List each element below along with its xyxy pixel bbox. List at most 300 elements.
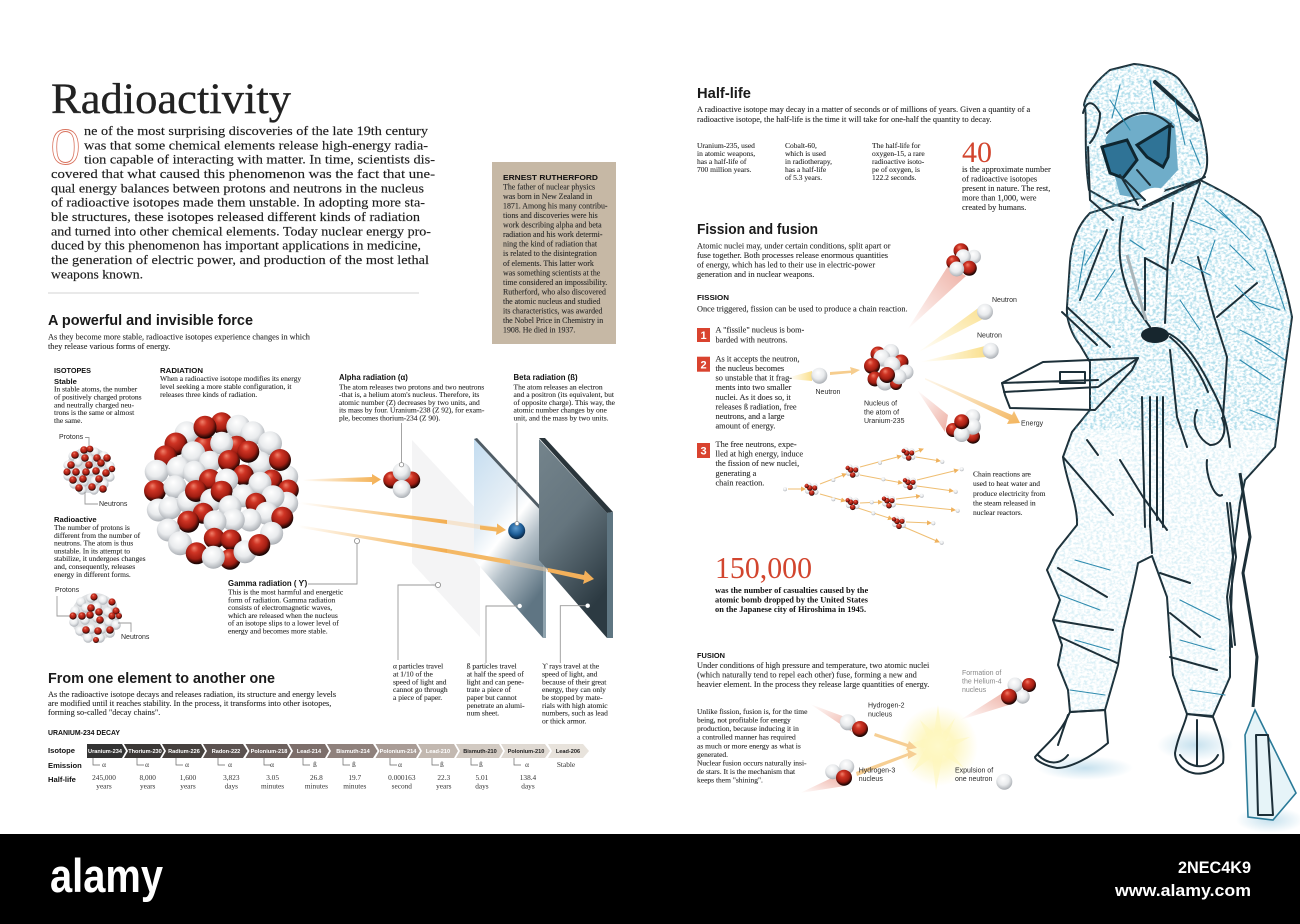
- alpha radiation text: Alpha radiation (α): [339, 373, 408, 382]
- suit fold marks: [1060, 80, 1285, 695]
- row labels: Emission: [48, 761, 82, 770]
- cobalt-60 fact: has a half-life: [785, 165, 827, 174]
- step 2: the nucleus becomes: [716, 364, 784, 373]
- oxygen-15 fact: The half-life for: [872, 141, 921, 150]
- step 2: As it accepts the neutron,: [716, 354, 800, 363]
- alpha particle: [383, 423, 420, 498]
- half-life row: years: [140, 782, 156, 790]
- expelled neutron: [955, 768, 1012, 790]
- free neutrons: Neutron: [977, 332, 1002, 340]
- suit texture: [1048, 64, 1292, 716]
- stable isotope text: and neutrally charged neu-: [54, 400, 135, 409]
- intro text block: ble structures, these isotopes released different kinds of radiation: [51, 210, 421, 224]
- statistic: 40: more than 1,000, were: [962, 194, 1037, 202]
- section: Half-life: [697, 85, 1051, 212]
- gamma radiation text and leader: energy and becomes more stable.: [228, 626, 328, 636]
- gamma radiation text and leader: of an isotope slips to a lower level of: [228, 619, 339, 628]
- upper fragment with trail: [907, 243, 981, 330]
- emission row: α: [102, 760, 106, 769]
- gamma radiation text and leader: This is the most harmful and energetic: [228, 588, 344, 596]
- biography heading: ERNEST RUTHERFORD: [503, 173, 599, 182]
- fission diagram: [790, 243, 1044, 444]
- intro text: As they become more stable, radioactive isotopes experience changes in which: [48, 332, 311, 342]
- face and gas mask: [1083, 82, 1205, 220]
- emission row: ß: [313, 760, 317, 769]
- beta radiation text: [514, 373, 616, 422]
- penetration note: beta: at half the speed of: [467, 670, 524, 678]
- fusion side note: [697, 707, 808, 785]
- penetration note: gamma: be stopped by mate-: [542, 693, 603, 702]
- penetration note: gamma: speed of light, and: [542, 670, 598, 678]
- expelled neutron: one neutron: [955, 776, 992, 783]
- penetration note: gamma: energy, they can only: [542, 685, 606, 694]
- gamma beam arrow: [298, 525, 594, 584]
- heading: From one element to another one: [48, 670, 275, 687]
- penetration note: alpha: a piece of paper.: [393, 693, 442, 702]
- uranium-235 fact: [697, 141, 755, 174]
- half-life row: years: [436, 782, 452, 790]
- step 3: chain reaction.: [716, 479, 764, 488]
- statistic: 40: created by humans.: [962, 203, 1026, 212]
- step 3: lled at high energy, induce: [716, 450, 803, 459]
- helium-4 nucleus: [960, 670, 1036, 720]
- chain reaction note: Chain reactions are: [973, 470, 1032, 479]
- radiation beams: [298, 474, 594, 584]
- radioactive nucleus diagram: Neutrons: [121, 634, 150, 641]
- isotopes heading: ISOTOPES: [54, 366, 91, 375]
- description: As the radioactive isotope decays and releases radiation, its structure and energy levels: [48, 690, 336, 699]
- heading: Half-life: [697, 85, 751, 102]
- oxygen-15 fact: [872, 141, 925, 182]
- biography text: The father of nuclear physics: [503, 182, 595, 192]
- oxygen-15 fact: radioactive isoto-: [872, 157, 925, 166]
- penetration note: alpha: [393, 582, 448, 702]
- half-life row: days: [475, 782, 489, 790]
- suit silhouette: [1047, 180, 1292, 716]
- step 1: barded with neutrons.: [716, 335, 788, 344]
- fission heading: FISSION: [697, 293, 729, 302]
- oxygen-15 fact: 122.2 seconds.: [872, 173, 916, 182]
- hood: [1084, 64, 1207, 210]
- stock photo footer band: [0, 834, 1300, 924]
- lower fragment with trail: [917, 390, 981, 444]
- panel: radiation text: releases three kinds of radiation.: [160, 390, 257, 399]
- isotope chevrons: Bismuth-210: [463, 749, 497, 755]
- step 2: amount of energy.: [716, 422, 775, 431]
- logo: alamy: [50, 849, 163, 902]
- decay chain chart: [48, 728, 589, 790]
- penetration note: alpha: at 1/10 of the: [393, 670, 433, 678]
- description: Atomic nuclei may, under certain conditions, split apart or: [697, 241, 891, 250]
- helium-4 nucleus: the Helium-4: [962, 678, 1002, 686]
- half-life row: 22.3: [437, 773, 451, 782]
- isotope chevrons: [87, 744, 589, 758]
- image id: 2NEC4K9: [1178, 858, 1251, 877]
- large atomic nucleus: [144, 412, 299, 570]
- stable isotope text: trons is the same or almost: [54, 408, 135, 417]
- chain reaction note: nuclear reactors.: [973, 508, 1023, 517]
- emission row: ß: [352, 760, 356, 769]
- alpha radiation text: its mass by four. Uranium-238 (Z 92), for exam-: [339, 406, 485, 415]
- alpha radiation text: The atom releases two protons and two neutrons: [339, 382, 484, 391]
- biography text: Rutherford, who also discovered: [503, 287, 606, 296]
- row labels: Isotope: [48, 746, 75, 755]
- energy arrow: [925, 378, 1044, 428]
- statistic: 150,000: atomic bomb dropped by the United States: [715, 596, 869, 604]
- panel: fusion text: heavier element. In the process they release large quantities of energy.: [697, 680, 929, 689]
- radioactive isotope text: [54, 515, 146, 579]
- intro text block: weapons known.: [51, 267, 143, 281]
- beta radiation text: of opposite charge). This way, the: [514, 398, 616, 407]
- uranium-235 nucleus: Nucleus of: [864, 400, 897, 408]
- statistic: 40: of radioactive isotopes: [962, 174, 1037, 184]
- emission row: α: [270, 760, 274, 769]
- intro text block: of radioactive isotopes made them unstable. In adopting more sta-: [51, 196, 425, 210]
- penetration note: alpha: α particles travel: [393, 662, 443, 671]
- fusion side note: de stars. It is the mechanism that: [697, 767, 796, 776]
- stable nucleus diagram: Neutrons: [99, 501, 128, 508]
- panel: fusion text: FUSION: [697, 651, 725, 660]
- biography text: is related to the disintegration: [503, 249, 597, 258]
- half-life row: years: [180, 782, 196, 790]
- intro text block: covered that what caused this phenomenon was the fact that une-: [51, 167, 435, 181]
- penetration note: gamma: ϒ rays travel at the: [542, 662, 600, 671]
- intro text: [48, 332, 311, 351]
- stable isotope text: the same.: [54, 416, 82, 425]
- emission row: α: [525, 760, 529, 769]
- biography text: its characteristics, was awarded: [503, 306, 603, 315]
- half-life row: days: [225, 782, 238, 790]
- cobalt-60 fact: which is used: [785, 149, 826, 158]
- alpha beam arrow: [303, 474, 381, 485]
- radioactive nucleus diagram: Protons: [55, 587, 80, 594]
- fusion side note: a controlled manner has required: [697, 733, 796, 742]
- biography text: was something scientists at the: [503, 268, 601, 277]
- half-life row: 5.01: [476, 773, 489, 782]
- panel: fusion text: (which naturally tend to repel each other) fuse, forming a new and: [697, 671, 918, 680]
- penetration note: alpha: cannot go through: [393, 685, 448, 694]
- step 2: [697, 354, 800, 431]
- website: www.alamy.com: [1114, 881, 1251, 900]
- panel: radiation text: level seeking a more stable configuration, it: [160, 382, 292, 391]
- chain reaction arrows: [788, 449, 958, 542]
- panel: fusion text: [697, 651, 930, 785]
- emission row: Stable: [557, 760, 575, 769]
- chain reaction note: produce electricity from: [973, 489, 1046, 498]
- step 1: A "fissile" nucleus is bom-: [716, 326, 805, 335]
- step 2: neutrons, and a large: [716, 412, 785, 421]
- cobalt-60 fact: Cobalt-60,: [785, 141, 817, 150]
- step 1: 1: [700, 330, 707, 342]
- fusion diagram: [800, 670, 1036, 793]
- helium-4 nucleus: nucleus: [962, 687, 987, 694]
- incoming neutron: [790, 367, 860, 396]
- section: A powerful and invisible force: [48, 312, 311, 351]
- illustration: technician in protective suit: [1002, 60, 1300, 833]
- uranium-235 fact: 700 million years.: [697, 165, 751, 174]
- half-life row: [92, 773, 537, 790]
- energy burst: [898, 705, 978, 790]
- stable isotope text: [54, 377, 142, 425]
- step 2: ments into two smaller: [716, 383, 792, 392]
- step 2: releases ß radiation, free: [716, 402, 797, 412]
- isotope chevrons: Uranium-234: [88, 749, 123, 755]
- alpha radiation text: [339, 373, 485, 422]
- penetration note: beta: num sheet.: [467, 709, 499, 718]
- stable isotope text: Stable: [54, 377, 77, 386]
- penetration note: gamma: [542, 604, 608, 725]
- step 3: the fission of new nuclei,: [716, 459, 799, 468]
- step 3: [697, 440, 803, 488]
- energy arrow: Energy: [1021, 420, 1044, 428]
- half-life row: years: [96, 782, 112, 790]
- biography text: the Nobel Price in Chemistry in: [503, 316, 603, 325]
- half-life row: days: [521, 782, 535, 790]
- penetration note: gamma: because of their great: [542, 677, 607, 686]
- isotope chevrons: Lead-206: [556, 749, 580, 755]
- panel: isotopes: [54, 366, 150, 643]
- hydrogen-3 nucleus: [800, 749, 917, 793]
- biography text: ning the kind of radiation that: [503, 240, 598, 249]
- emission row: α: [185, 760, 189, 769]
- uranium-235 nucleus: [864, 344, 914, 425]
- radioactive isotope text: Radioactive: [54, 515, 97, 524]
- penetration note: beta: trate a piece of: [467, 685, 512, 694]
- fusion side note: Unlike fission, fusion is, for the time: [697, 707, 808, 716]
- radioactive isotope text: stabilize, it undergoes changes: [54, 554, 146, 563]
- oxygen-15 fact: oxygen-15, a rare: [872, 149, 925, 158]
- panel: radiation text: RADIATION: [160, 366, 203, 375]
- half-life row: 138.4: [520, 773, 537, 782]
- hydrogen-2 nucleus: Hydrogen-2: [868, 703, 905, 710]
- fusion side note: as much or more energy as what is: [697, 741, 801, 750]
- panel: fission steps: Once triggered, fission can be used to produce a chain reaction.: [697, 304, 908, 313]
- panel: Ernest Rutherford biography: [492, 162, 616, 344]
- step 3: The free neutrons, expe-: [716, 440, 797, 449]
- statistic: 150,000: 150,000: [715, 550, 812, 585]
- gamma radiation text and leader: form of radiation. Gamma radiation: [228, 595, 336, 604]
- isotope chevrons: Polonium-214: [380, 749, 417, 755]
- penetration note: alpha: speed of light and: [393, 677, 447, 686]
- penetration note: beta: [467, 604, 525, 718]
- hanging cable bag: [1245, 710, 1296, 820]
- half-life row: 26.8: [310, 773, 323, 782]
- description: [697, 241, 891, 279]
- cobalt-60 fact: of 5.3 years.: [785, 173, 822, 182]
- chain reaction diagram: [783, 447, 1046, 545]
- isotope chevrons: Polonium-210: [508, 749, 544, 755]
- heading: A powerful and invisible force: [48, 312, 253, 329]
- cobalt-60 fact: in radiotherapy,: [785, 157, 832, 166]
- penetration note: beta: penetrate an alumi-: [467, 701, 525, 710]
- half-life row: second: [392, 782, 412, 790]
- emission row: α: [228, 760, 232, 769]
- drop cap: O: [51, 119, 80, 176]
- intro text block: duced by this phenomenon has important applications in medicine,: [51, 239, 421, 253]
- isotope chevrons: Thorium-230: [128, 749, 162, 755]
- emission row: [93, 758, 575, 769]
- step 2: 2: [700, 360, 707, 372]
- description: A radioactive isotope may decay in a matter of seconds or of millions of years. Given a quantity of a: [697, 105, 1030, 114]
- beta radiation text: The atom releases an electron: [514, 382, 603, 391]
- beta beam arrow: [300, 502, 506, 535]
- statistic: 40: 40: [962, 136, 992, 169]
- description: forming so-called "decay chains".: [48, 708, 160, 717]
- penetration note: gamma: or thick armor.: [542, 716, 586, 725]
- expelled neutron: Expulsion of: [955, 768, 993, 775]
- cobalt-60 fact: [785, 141, 832, 182]
- hydrogen-3 nucleus: Hydrogen-3: [859, 768, 895, 775]
- biography text: of elements. This latter work: [503, 259, 594, 268]
- isotope chevrons: Radium-226: [168, 749, 200, 755]
- statistic: 150,000: on the Japanese city of Hiroshima in 1945.: [715, 605, 866, 614]
- fusion side note: production, because inducing it in: [697, 724, 799, 733]
- row labels: [48, 746, 82, 784]
- radioactive isotope text: different from the number of: [54, 531, 141, 540]
- gamma radiation text and leader: consists of electromagnetic waves,: [228, 603, 332, 612]
- fusion side note: generated.: [697, 750, 728, 759]
- intro text block: [51, 119, 435, 281]
- free neutrons: Neutron: [992, 297, 1017, 304]
- gamma radiation text and leader: Gamma radiation ( ϒ): [228, 579, 308, 588]
- description: fuse together. Both processes release enormous quantities: [697, 251, 888, 260]
- half-life row: 245,000: [92, 773, 116, 782]
- description: of energy, which has led to their use in electric-power: [697, 260, 875, 270]
- biography text: work describing alpha and beta: [503, 221, 602, 230]
- isotope chevrons: Polonium-218: [251, 749, 287, 755]
- description: radioactive isotope, the half-life is the time it will take for one-half the quantity to decay.: [697, 115, 992, 124]
- fusion side note: Nuclear fusion occurs naturally insi-: [697, 759, 807, 768]
- description: are modified until it reaches stability. In the process, it transforms into other isotopes,: [48, 699, 331, 708]
- statistic: 40: [962, 136, 1051, 212]
- hydrogen-3 nucleus: nucleus: [859, 776, 883, 783]
- suit seams and cables: [1053, 183, 1257, 707]
- isotope chevrons: Radon-222: [212, 749, 240, 755]
- beta radiation text: Beta radiation (ß): [514, 373, 578, 382]
- fusion side note: being, not profitable for energy: [697, 716, 791, 725]
- radioactive isotope text: energy in different forms.: [54, 570, 131, 579]
- row labels: Half-life: [48, 775, 76, 784]
- title: Radioactivity: [51, 76, 292, 123]
- intro text block: tion capable of interacting with matter. In time, scientists dis-: [84, 153, 435, 167]
- half-life row: minutes: [261, 782, 284, 790]
- chart title: URANIUM-234 DECAY: [48, 728, 120, 737]
- biography text: 1871. Among his many contribu-: [503, 202, 608, 211]
- statistic: 150,000: was the number of casualties caused by the: [715, 586, 868, 595]
- half-life row: 3.05: [266, 773, 279, 782]
- uranium-235 fact: has a half-life of: [697, 157, 747, 166]
- statistic: 40: is the approximate number: [962, 165, 1051, 174]
- chain reaction note: [973, 470, 1046, 517]
- stable nucleus diagram: [59, 434, 128, 508]
- intro text block: ne of the most surprising discoveries of the late 19th century: [84, 124, 429, 138]
- uranium-235 nucleus: the atom of: [864, 410, 899, 416]
- alpha radiation text: ple, becomes thorium-234 (Z 90).: [339, 413, 440, 422]
- radiation meter box: [1002, 358, 1138, 410]
- description: [48, 690, 336, 717]
- uranium-235 fact: in atomic weapons,: [697, 149, 755, 158]
- stable isotope text: In stable atoms, the number: [54, 384, 138, 394]
- incoming neutron: Neutron: [816, 389, 841, 396]
- biography text: radiation and his work determi-: [503, 230, 603, 239]
- statistic: 150,000: [715, 550, 869, 614]
- penetration note: beta: ß particles travel: [467, 662, 517, 671]
- alpha radiation text: atomic number (Z) decreases by two units, and: [339, 398, 480, 407]
- intro text block: the generation of electric power, and production of the most lethal: [51, 253, 430, 267]
- intro text block: and turned into other chemical elements. Today nuclear energy pro-: [51, 224, 431, 238]
- free neutrons: [917, 297, 1017, 362]
- step 3: generating a: [716, 469, 757, 478]
- description: generation and in nuclear weapons.: [697, 270, 814, 279]
- panel: radiation text: [160, 366, 301, 399]
- beta particle: [508, 423, 525, 539]
- beta radiation text: and a positron (its equivalent, but: [514, 390, 615, 399]
- description: [697, 105, 1030, 124]
- mini nuclei: [804, 447, 917, 529]
- stable isotope text: of positively charged protons: [54, 392, 142, 401]
- biography text: 1908. He died in 1937.: [503, 326, 575, 334]
- half-life row: 8,000: [139, 773, 156, 782]
- biography text: time considered an impossibility.: [503, 278, 607, 287]
- step 2: nuclei. As it does so, it: [716, 393, 792, 402]
- radioactive isotope text: neutrons. The atom is thus: [54, 539, 133, 548]
- emission row: α: [398, 760, 402, 769]
- isotope chevrons: Lead-210: [426, 749, 450, 755]
- hydrogen-2 nucleus: nucleus: [868, 712, 893, 718]
- isotope chevrons: Bismuth-214: [336, 749, 371, 755]
- ground shadows: [1037, 729, 1300, 833]
- gamma radiation text and leader: [228, 538, 360, 636]
- half-life row: minutes: [343, 782, 367, 790]
- panel: fusion text: Under conditions of high pressure and temperature, two atomic nuclei: [697, 661, 930, 670]
- intro text block: was that some chemical elements release high-energy radia-: [84, 138, 428, 152]
- fusion side note: keeps them "shining".: [697, 776, 763, 785]
- emission row: ß: [440, 760, 444, 769]
- aluminum sheet: [474, 438, 546, 638]
- uranium-235 fact: Uranium-235, used: [697, 141, 755, 150]
- shielding plates: paper, aluminum, lead: [412, 438, 613, 638]
- isotope chevrons: Lead-214: [297, 749, 322, 755]
- step 3: 3: [700, 446, 707, 458]
- panel: fission steps: [697, 293, 908, 488]
- half-life row: 3,823: [223, 773, 240, 782]
- statistic: 40: present in nature. The rest,: [962, 184, 1050, 193]
- beta radiation text: unit, and the mass by two units.: [514, 413, 609, 422]
- biography text: the atomic nucleus and studied: [503, 297, 600, 306]
- half-life row: 0.000163: [388, 773, 416, 782]
- biography text: tions and discoveries were his: [503, 211, 598, 220]
- step 2: so unstable that it frag-: [716, 374, 792, 382]
- beta radiation text: atomic number changes by one: [514, 406, 607, 415]
- radioactive isotope text: and, consequently, releases: [54, 562, 135, 571]
- panel: radiation text: When a radioactive isotope modifies its energy: [160, 374, 301, 383]
- penetration note: gamma: numbers, such as lead: [542, 709, 608, 718]
- chain reaction note: used to heat water and: [973, 479, 1040, 488]
- helium-4 nucleus: Formation of: [962, 670, 1001, 677]
- emission row: α: [145, 760, 149, 769]
- biography text: [503, 182, 608, 334]
- step 1: [697, 326, 805, 344]
- penetration note: beta: light and can pene-: [467, 677, 524, 686]
- penetration note: gamma: rials with high atomic: [542, 701, 608, 710]
- radioactive isotope text: unstable. In its attempt to: [54, 546, 130, 555]
- section: Fission and fusion intro: [697, 221, 891, 279]
- lead sheet: [539, 438, 613, 638]
- intro text: they release various forms of energy.: [48, 342, 170, 351]
- biography text: was born in New Zealand in: [503, 192, 592, 201]
- half-life row: minutes: [305, 782, 328, 790]
- hydrogen-2 nucleus: [810, 703, 917, 750]
